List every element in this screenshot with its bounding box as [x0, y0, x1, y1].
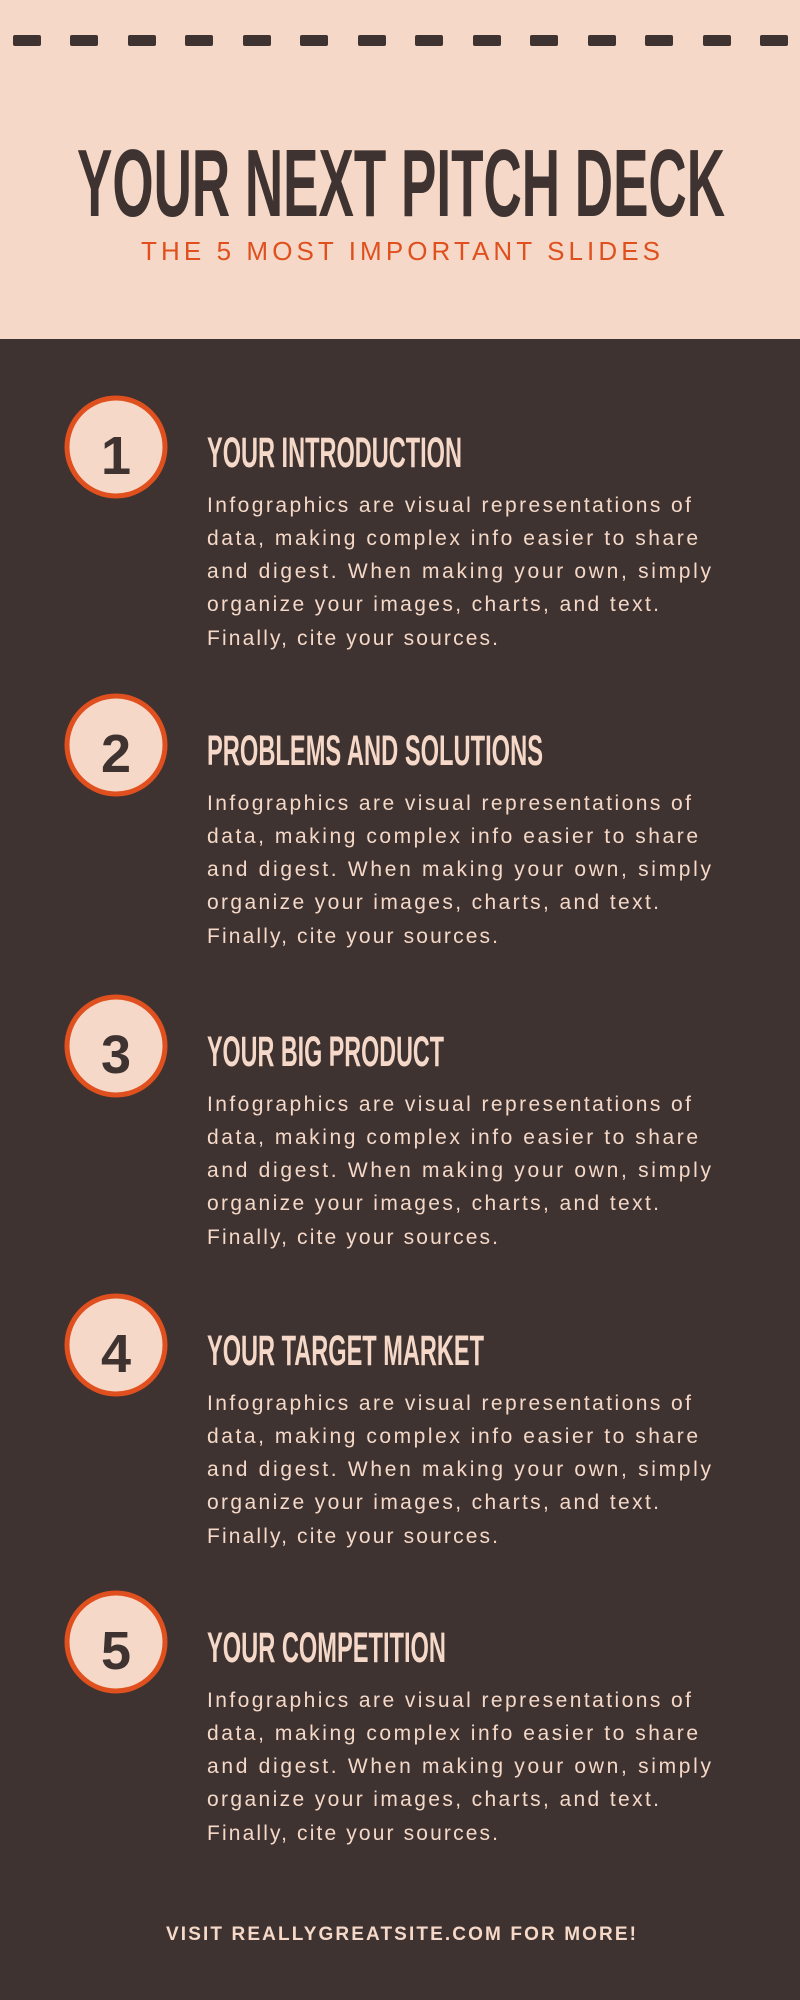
- icon: number circle 2: [67, 696, 165, 794]
- body 3: and digest. When making your own, simply: [207, 1159, 712, 1182]
- body 1: Infographics are visual representations of: [207, 494, 691, 517]
- icon: number circle 5: [67, 1593, 165, 1691]
- body 1: and digest. When making your own, simply: [207, 560, 712, 583]
- body 2: Infographics are visual representations of: [207, 792, 691, 815]
- body 1: Finally, cite your sources.: [207, 627, 498, 650]
- body 2: organize your images, charts, and text.: [207, 891, 659, 914]
- heading 3: YOUR BIG PRODUCT: [207, 1028, 444, 1076]
- body 2: data, making complex info easier to share: [207, 825, 698, 848]
- body 3: data, making complex info easier to share: [207, 1126, 698, 1149]
- body 5: data, making complex info easier to share: [207, 1722, 698, 1745]
- item 4: [67, 1296, 712, 1548]
- body 2: and digest. When making your own, simply: [207, 858, 712, 881]
- heading 5: YOUR COMPETITION: [207, 1624, 446, 1672]
- icon: number circle 1: [67, 398, 165, 496]
- heading 2: PROBLEMS AND SOLUTIONS: [207, 727, 543, 775]
- body 4: [207, 1392, 712, 1548]
- body 4: Finally, cite your sources.: [207, 1525, 498, 1548]
- body 4: organize your images, charts, and text.: [207, 1491, 659, 1514]
- body 5: organize your images, charts, and text.: [207, 1788, 659, 1811]
- heading 4: YOUR TARGET MARKET: [207, 1327, 484, 1375]
- footer: VISIT REALLYGREATSITE.COM FOR MORE!: [166, 1924, 636, 1945]
- body 1: [207, 494, 712, 650]
- icon: number circle 4: [67, 1296, 165, 1394]
- item 5: [67, 1593, 712, 1845]
- body 5: Finally, cite your sources.: [207, 1822, 498, 1845]
- body 5: Infographics are visual representations of: [207, 1689, 691, 1712]
- body 1: data, making complex info easier to share: [207, 527, 698, 550]
- body 4: Infographics are visual representations of: [207, 1392, 691, 1415]
- icon: number circle 3: 3: [101, 1025, 131, 1085]
- item 1: [67, 398, 712, 650]
- body 4: and digest. When making your own, simply: [207, 1458, 712, 1481]
- body 5: [207, 1689, 712, 1845]
- icon: number circle 4: 4: [101, 1324, 131, 1384]
- body 2: [207, 792, 712, 948]
- body 3: Infographics are visual representations of: [207, 1093, 691, 1116]
- icon: number circle 2: 2: [101, 724, 131, 784]
- item 2: [67, 696, 712, 948]
- header panel: [0, 0, 800, 339]
- body 1: organize your images, charts, and text.: [207, 593, 659, 616]
- icon: number circle 3: [67, 997, 165, 1095]
- heading 1: YOUR INTRODUCTION: [207, 429, 462, 477]
- item 3: [67, 997, 712, 1249]
- icon: number circle 5: 5: [101, 1621, 131, 1681]
- icon: number circle 1: 1: [101, 426, 131, 486]
- body 4: data, making complex info easier to share: [207, 1425, 698, 1448]
- body 3: Finally, cite your sources.: [207, 1226, 498, 1249]
- subtitle: THE 5 MOST IMPORTANT SLIDES: [141, 236, 660, 266]
- body 5: and digest. When making your own, simply: [207, 1755, 712, 1778]
- body 2: Finally, cite your sources.: [207, 925, 498, 948]
- body 3: [207, 1093, 712, 1249]
- body 3: organize your images, charts, and text.: [207, 1192, 659, 1215]
